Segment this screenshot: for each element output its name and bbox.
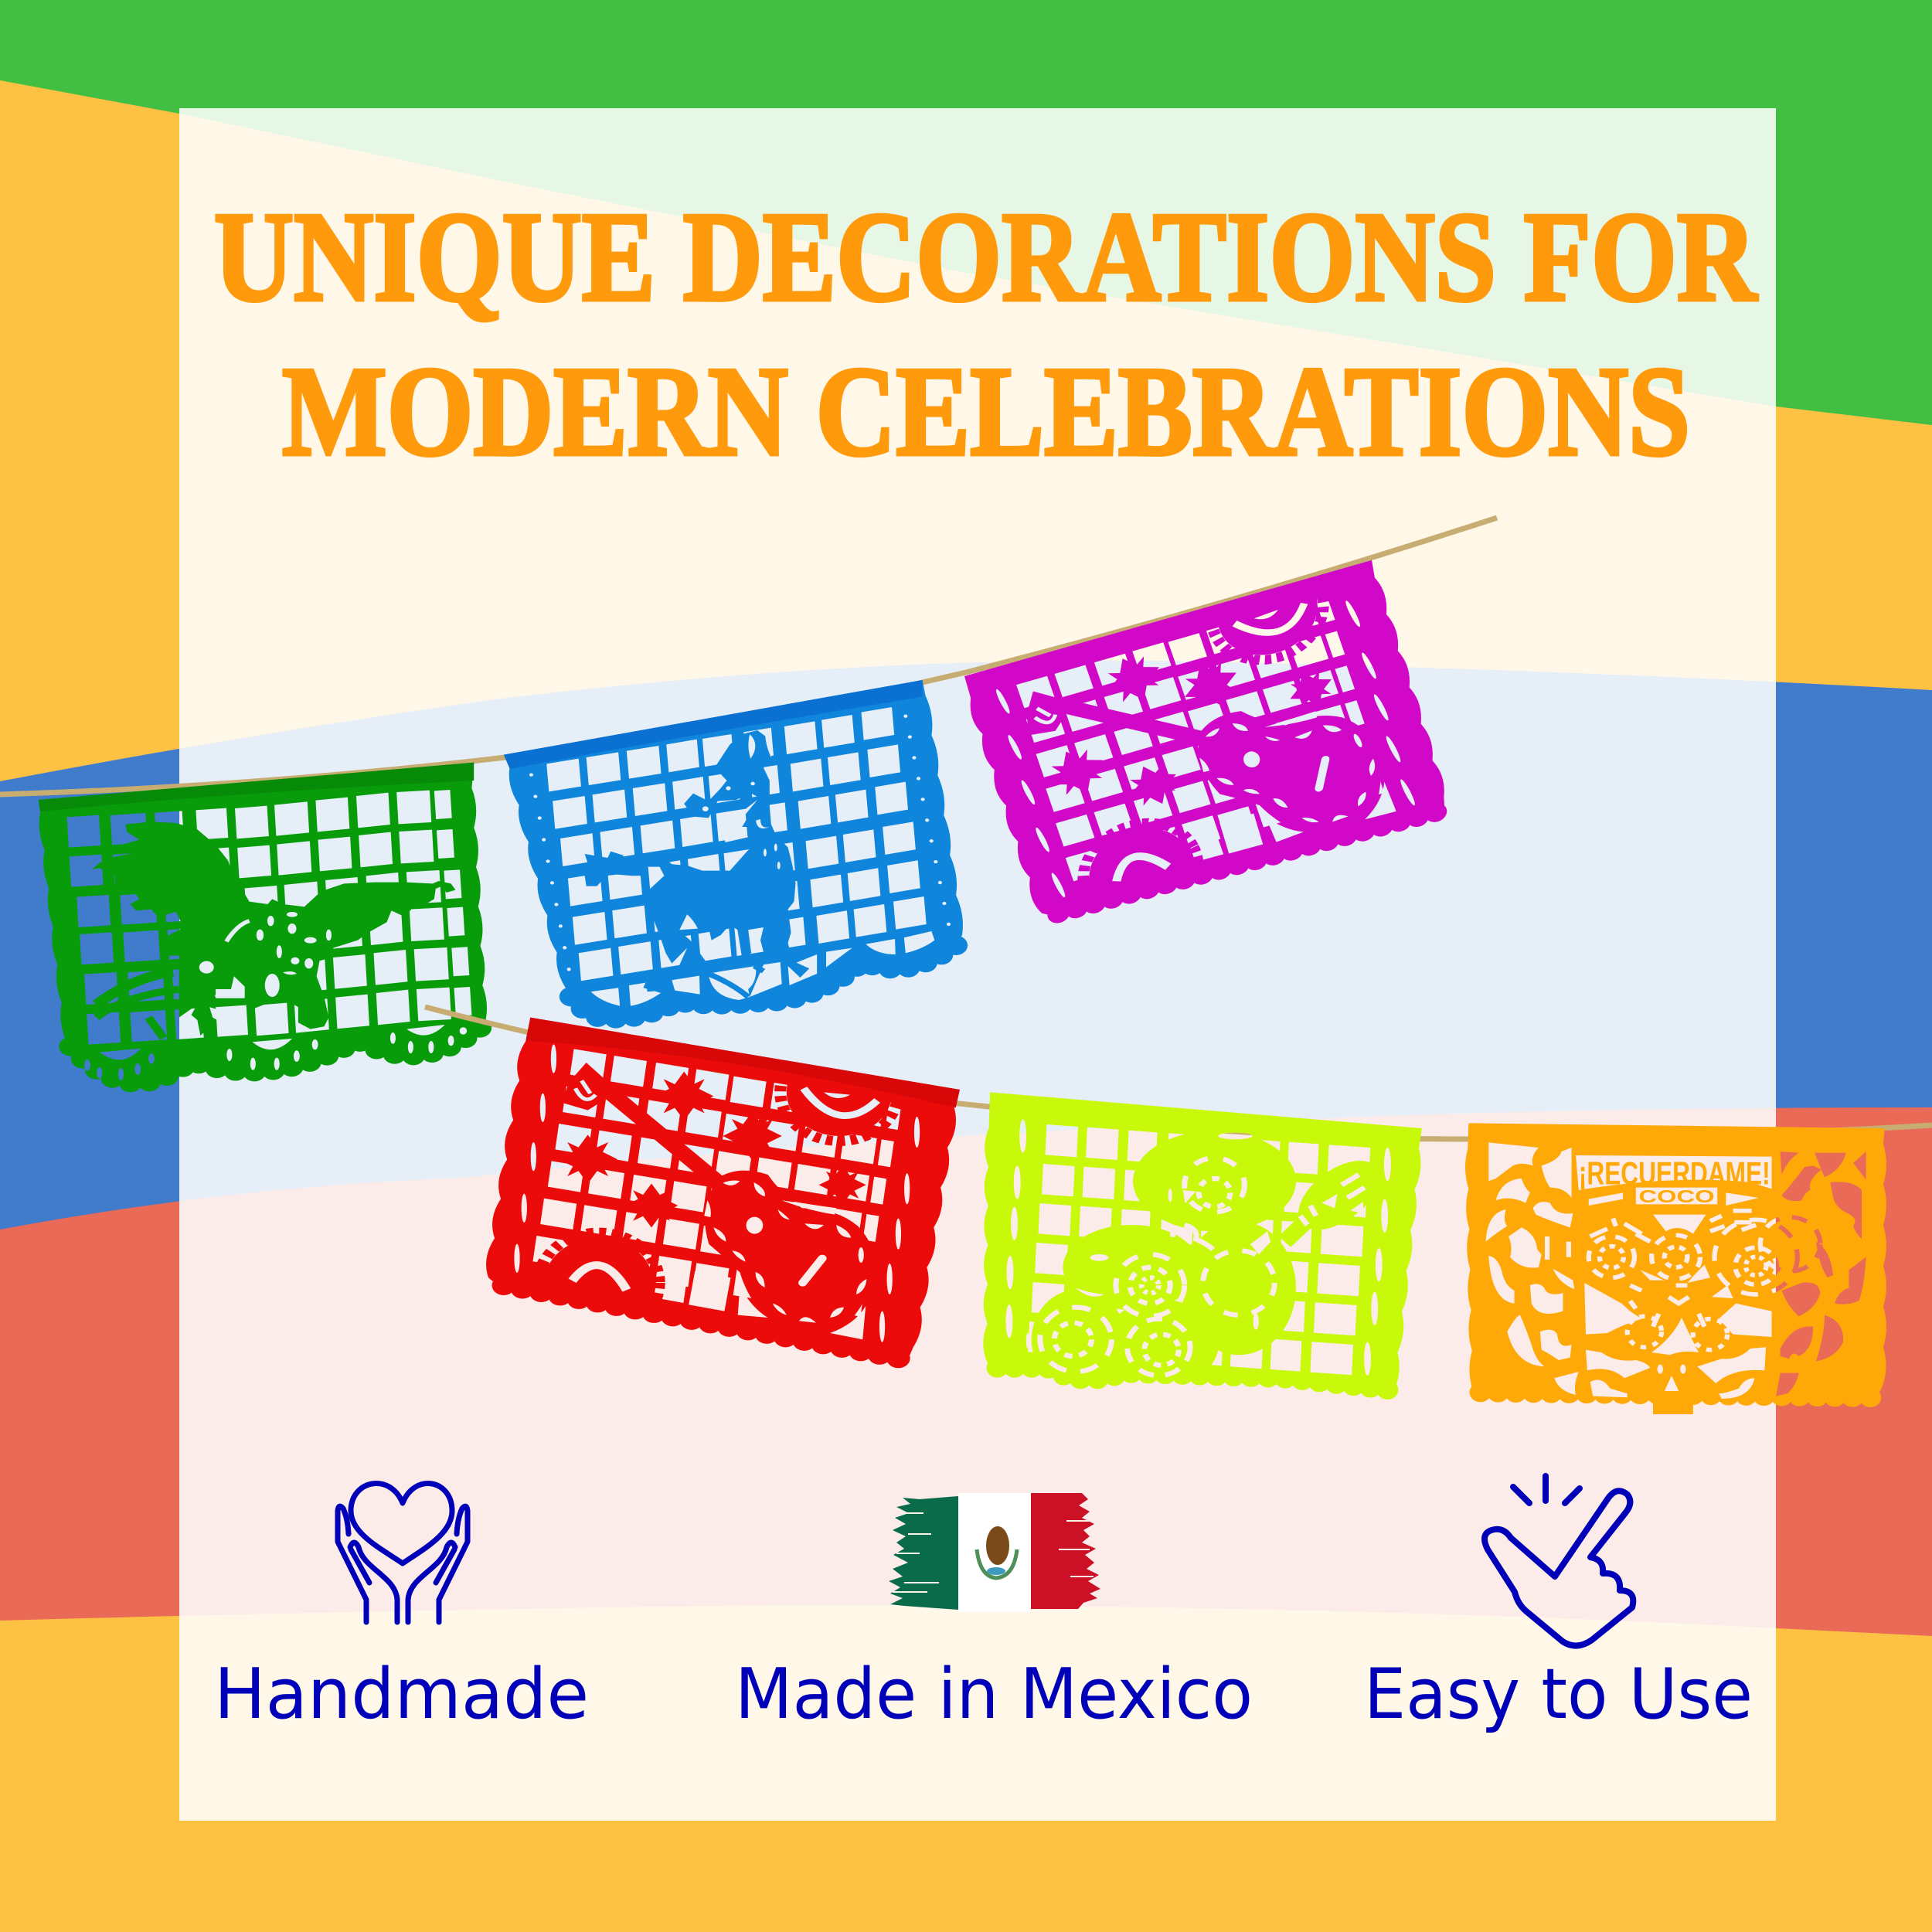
- string: upper banner cord: [0, 518, 1497, 794]
- title: MODERN CELEBRATIONS: [282, 340, 1690, 482]
- banner: magenta guitar flag: [964, 560, 1447, 923]
- icon: Mexican flag brush stroke: [889, 1493, 1100, 1612]
- banner: blue deer flag: [504, 680, 963, 1019]
- icon: finger snap hand: [1485, 1476, 1633, 1646]
- background: red band: [0, 1107, 1932, 1700]
- label: Handmade: Handmade: [214, 1654, 589, 1735]
- string: lower banner cord: [425, 1007, 1932, 1139]
- label: Made in Mexico: Made in Mexico: [735, 1654, 1253, 1735]
- icon: hands holding heart: [338, 1484, 468, 1622]
- banner: orange Recuerdame flag: [1465, 1123, 1886, 1414]
- background: lower gold band: [0, 1605, 1932, 1932]
- label: Easy to Use: Easy to Use: [1364, 1654, 1753, 1735]
- banner: red guitar flag: [486, 1018, 960, 1360]
- background: blue band: [0, 661, 1932, 1700]
- banner: lime skeleton flag: [983, 1092, 1422, 1393]
- title: [214, 185, 1758, 482]
- banner: green eagle flag: [39, 763, 487, 1083]
- background: green wedge: [0, 0, 1932, 425]
- panel: translucent cream sheet: [179, 108, 1776, 1821]
